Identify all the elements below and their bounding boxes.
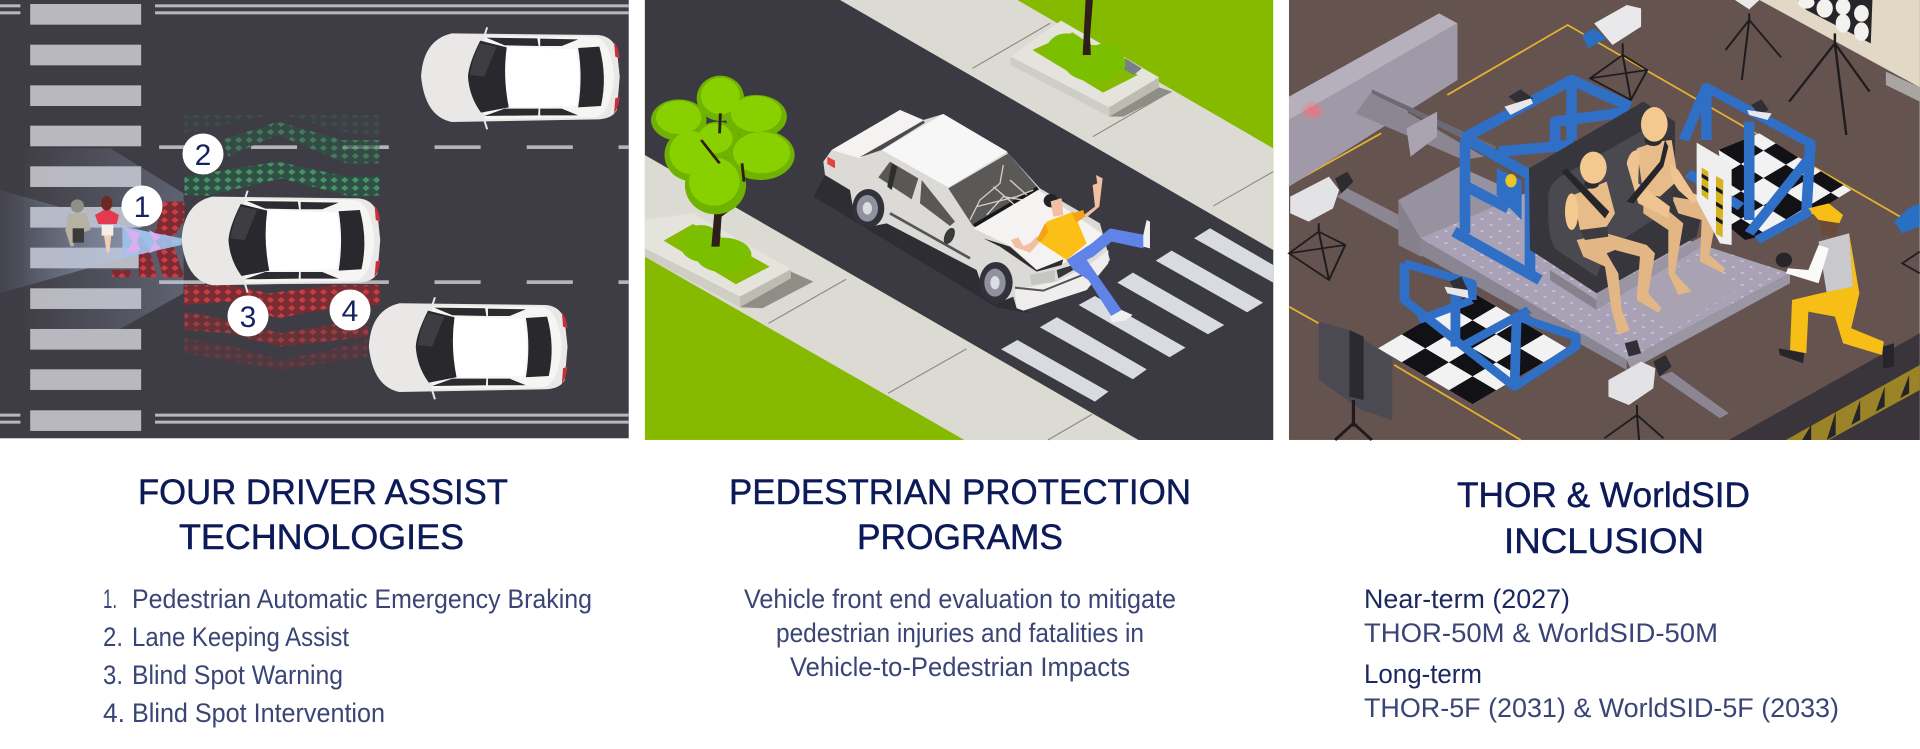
technician [1776,203,1894,368]
road [645,0,1273,440]
crosswalk stripes [1001,228,1273,402]
blue rig front [1454,80,1630,280]
headlight cone wide [24,148,184,330]
floor marking lines [1289,25,1900,440]
car lower right [369,297,568,399]
panel: driver assist road illustration [0,0,629,438]
monitor on stand [1319,322,1392,440]
crash seat [1529,102,1702,310]
lower planter [645,213,813,308]
column 3 timeline: Near-term (2027) [1364,584,1570,614]
rig cameras small [1444,89,1772,357]
blue plate with hazard symbol [1497,168,1522,220]
impact sled block [1289,13,1496,230]
pedestrian on hood [1011,175,1150,322]
marker 3: 3 [240,301,256,334]
seat rig and dummies [1454,80,1736,335]
sidewalks [645,0,1273,440]
camera on tripod left [1289,172,1353,280]
crash dummy far [1627,107,1725,295]
marker 4 [330,290,370,330]
car shadow [813,175,1030,313]
column 2 description: Vehicle front end evaluation to mitigate [744,584,1176,614]
column 2 heading: PEDESTRIAN PROTECTION [729,473,1191,512]
crash dummy near [1562,152,1662,335]
column 1 numbered list: Blind Spot Intervention [132,698,385,728]
column 3 heading: INCLUSION [1504,522,1704,561]
pedestrians [65,196,119,253]
column 1 numbered list: Pedestrian Automatic Emergency Braking [132,584,592,614]
camera on tripod top [1582,5,1647,100]
tree left [651,76,795,247]
column 1 numbered list: Lane Keeping Assist [132,622,349,652]
column 2 description: pedestrian injuries and fatalities in [776,618,1144,648]
checker floor near [1378,292,1567,404]
car top right [421,27,620,129]
number markers [122,134,370,336]
wall [1759,0,1920,87]
marker 1 [122,186,162,226]
marker 3 [228,296,268,336]
column 1 numbered list: 4. [103,698,125,728]
column 3 timeline [1364,584,1839,723]
column 1 numbered list: Blind Spot Warning [132,660,343,690]
panel: crash test illustration [1289,0,1920,440]
column 1 heading: FOUR DRIVER ASSIST [138,473,508,512]
lane keeping zone [184,113,379,196]
column 1 heading: TECHNOLOGIES [179,518,464,557]
upper planter [1010,0,1172,117]
marker 4: 4 [342,295,358,328]
camera right edge [1894,203,1920,273]
car with assist [182,191,380,293]
column 1 numbered list: 2. [103,622,123,652]
marker 2: 2 [195,139,211,172]
blue rig right [1684,87,1810,240]
road edge lines [0,4,629,424]
column 2 heading: PROGRAMS [857,518,1063,557]
struck car and pedestrian [813,110,1150,322]
column 3 timeline: Long-term [1364,659,1482,689]
checker floor far [1719,133,1851,240]
blind spot warning zone [184,285,379,370]
hazard target board [1697,143,1732,245]
crosswalk [30,4,141,431]
light panel on tripods [1726,0,1920,135]
column 2 heading [729,473,1191,557]
lane dashes [159,145,629,284]
car body [823,110,1110,311]
column 2 description [744,584,1176,682]
marker 2 [182,134,224,174]
column 3 heading [1457,476,1750,561]
column 2 description: Vehicle-to-Pedestrian Impacts [790,652,1130,682]
column 1 numbered list [103,584,592,728]
test platform [1398,167,1790,418]
camera on tripod front [1604,355,1672,440]
column 1 heading [138,473,508,557]
marker 1: 1 [134,191,150,224]
blue rig lower [1404,263,1576,387]
column 3 heading: THOR & WorldSID [1457,476,1750,515]
column 1 numbered list: 3. [103,660,123,690]
floor mat [1623,257,1736,332]
sensor arcs [124,228,161,255]
sensor beam [122,227,182,258]
pedestrian braking zone [112,202,184,277]
headlight beam [0,190,182,293]
panel: pedestrian impact illustration [645,0,1273,440]
stage front [1729,333,1920,440]
column 1 numbered list: 1. [103,584,117,614]
column 3 timeline: THOR-5F (2031) & WorldSID-5F (2033) [1364,693,1839,723]
column 3 timeline: THOR-50M & WorldSID-50M [1364,618,1718,648]
